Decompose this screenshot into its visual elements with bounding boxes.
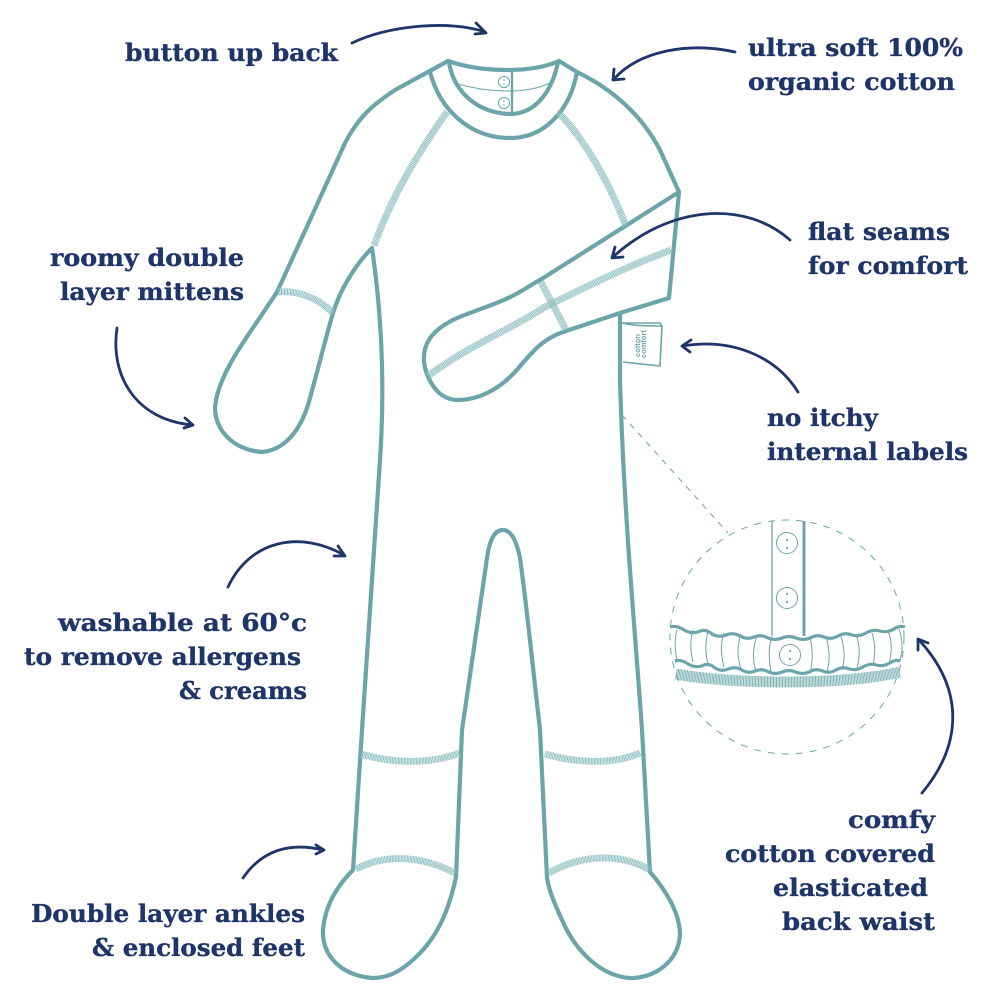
text: labels: internal labels xyxy=(767,437,968,466)
flat stitched seams xyxy=(278,112,671,873)
collar inner curve xyxy=(449,62,558,114)
text: organic cotton: organic cotton xyxy=(748,67,955,96)
text: washable xyxy=(24,608,307,705)
text: waist: back waist xyxy=(782,907,935,936)
garment outline xyxy=(215,61,680,978)
callout arrows xyxy=(116,23,953,878)
arrow: organic cotton xyxy=(613,48,735,80)
text: organic cotton xyxy=(748,33,963,96)
text: mittens: layer mittens xyxy=(60,277,244,306)
text: mittens: roomy double xyxy=(50,243,244,272)
text: ankles xyxy=(31,899,305,962)
fold-out label xyxy=(622,323,662,366)
text: washable: washable at 60°c xyxy=(57,608,307,637)
text: labels xyxy=(767,403,968,466)
elastic lower wave xyxy=(675,660,900,674)
elastic waist gathers xyxy=(675,629,902,673)
text: waist: elasticated xyxy=(773,873,928,902)
elastic top wave xyxy=(670,626,905,640)
back neck line xyxy=(458,83,550,91)
text: waist: cotton covered xyxy=(725,839,935,868)
waist stitch band xyxy=(676,672,900,682)
arrow: no itchy labels xyxy=(682,340,798,392)
text: flat seams xyxy=(808,217,968,280)
text: labels: no itchy xyxy=(767,403,879,432)
text: ankles: & enclosed feet xyxy=(92,933,305,962)
dashed magnifier circle xyxy=(670,520,904,754)
fold-out label: cotton xyxy=(633,334,642,357)
collar buttons xyxy=(498,76,510,109)
sleepsuit illustration xyxy=(215,61,680,978)
collar outer curve xyxy=(430,72,577,138)
text: waist: comfy xyxy=(848,805,936,834)
back placket xyxy=(771,520,773,636)
text: ankles: Double layer ankles xyxy=(31,899,305,928)
text: waist xyxy=(725,805,936,936)
text: flat seams: for comfort xyxy=(808,251,968,280)
text: button up back: button up back xyxy=(125,38,339,67)
arrow: button up back xyxy=(352,23,486,43)
text: washable: to remove allergens xyxy=(24,642,301,671)
placket buttons xyxy=(776,532,800,666)
text: flat seams: flat seams xyxy=(808,217,950,246)
arrow: ankles xyxy=(243,845,324,878)
arrow: mittens xyxy=(116,328,193,428)
text: organic cotton: ultra soft 100% xyxy=(748,33,963,62)
button placket line xyxy=(511,72,513,113)
text: mittens xyxy=(50,243,244,306)
dashed connector xyxy=(622,415,728,533)
waist detail inset xyxy=(622,415,905,754)
fold-out label: comfort xyxy=(639,330,648,358)
arrow: washable xyxy=(228,542,345,587)
text: washable: & creams xyxy=(179,676,307,705)
arrow: flat seams xyxy=(612,214,790,258)
arrow: waist xyxy=(918,639,953,793)
